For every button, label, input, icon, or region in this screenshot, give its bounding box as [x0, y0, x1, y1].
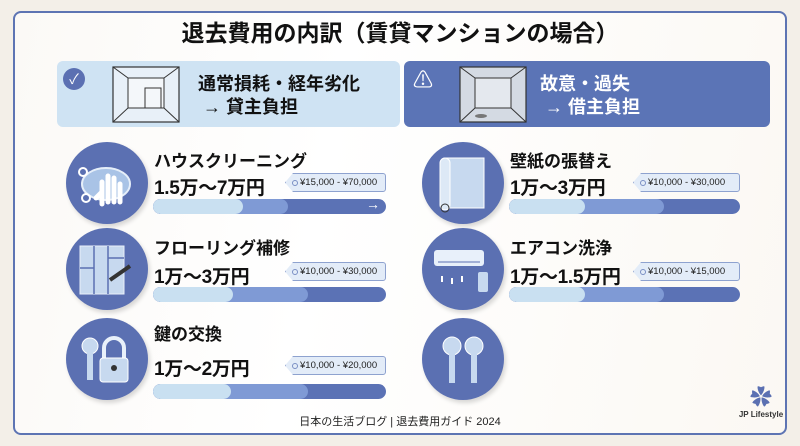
name: 鍵の交換 — [154, 325, 222, 344]
icon: check — [63, 68, 85, 90]
bar — [509, 199, 740, 214]
bar — [153, 199, 386, 214]
tag: ¥10,000 - ¥30,000 — [648, 177, 725, 188]
item: key exchange — [66, 318, 386, 404]
item: wallpaper — [422, 142, 740, 228]
bar — [153, 384, 386, 399]
logo — [739, 385, 783, 419]
tag — [285, 356, 386, 375]
title: 退去費用の内訳（賃貸マンションの場合） — [182, 20, 618, 46]
icon: damaged room — [459, 66, 527, 123]
text: → 借主負担 — [545, 97, 640, 117]
icon: wallpaper roll — [422, 142, 504, 224]
tag — [633, 262, 740, 281]
text — [540, 74, 640, 117]
tag: ¥10,000 - ¥20,000 — [300, 360, 377, 371]
icon: check: ✓ — [69, 71, 79, 87]
item: house cleaning — [66, 142, 386, 228]
tag: ¥15,000 - ¥70,000 — [300, 177, 377, 188]
footer: 日本の生活ブログ | 退去費用ガイド 2024 — [299, 416, 501, 428]
name: フローリング補修 — [154, 239, 290, 258]
price: 1.5万〜7万円 — [154, 178, 265, 199]
tag: ¥10,000 - ¥15,000 — [648, 266, 725, 277]
price: 1万〜2万円 — [154, 359, 249, 380]
icon: sakura: ✿ — [750, 385, 772, 410]
bar — [509, 287, 740, 302]
text — [198, 74, 360, 117]
bar — [153, 287, 386, 302]
tag — [285, 262, 386, 281]
brand: JP Lifestyle — [739, 410, 783, 419]
text: 故意・過失 — [540, 74, 630, 94]
text: 通常損耗・経年劣化 — [198, 74, 360, 94]
tag — [633, 173, 740, 192]
tag — [285, 173, 386, 192]
icon: key and lock — [66, 318, 148, 400]
item: flooring — [66, 228, 386, 314]
text: → 貸主負担 — [203, 97, 298, 117]
icon: clean room — [112, 66, 180, 123]
tag: ¥10,000 - ¥30,000 — [300, 266, 377, 277]
panel: tenant burden — [404, 61, 770, 127]
item: aircon — [422, 228, 740, 314]
price: 1万〜3万円 — [510, 178, 605, 199]
name: エアコン洗浄 — [510, 239, 612, 258]
name: ハウスクリーニング — [154, 152, 307, 171]
icon: floor — [66, 228, 148, 310]
price: 1万〜1.5万円 — [510, 267, 621, 288]
panel: landlord burden — [57, 61, 400, 127]
icon: air conditioner — [422, 228, 504, 310]
icon: cleaning — [66, 142, 148, 224]
price: 1万〜3万円 — [154, 267, 249, 288]
icon: warning: ⚠ — [413, 70, 433, 92]
name: 壁紙の張替え — [510, 152, 612, 171]
icon: keys — [422, 318, 504, 400]
